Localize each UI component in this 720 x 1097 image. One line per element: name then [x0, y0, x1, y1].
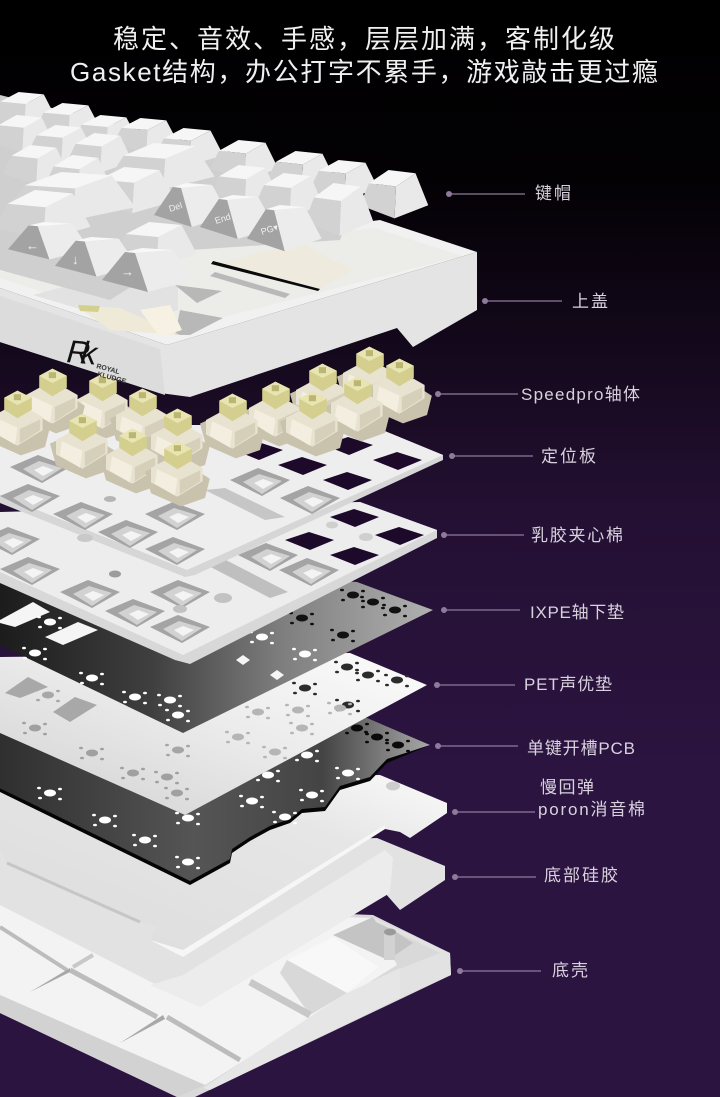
- logo: RK Royal Kluge: ROYAL: [95, 363, 121, 376]
- label: IXPE轴下垫: IXPE轴下垫: [530, 603, 624, 622]
- layer: plate: [0, 425, 443, 577]
- layer: IXPE pad: [0, 560, 433, 733]
- layer: Speedpro switches: [0, 347, 432, 506]
- label: 慢回弹poron消音棉: 慢回弹: [540, 777, 594, 797]
- label: 定位板: 定位板: [541, 447, 596, 466]
- label: 上盖: [482, 292, 608, 311]
- label: 键帽: [446, 184, 571, 203]
- label: 底部硅胶: [452, 866, 618, 885]
- exploded keyboard illustration: [0, 92, 477, 1097]
- label: PET声优垫: [434, 675, 612, 694]
- label: 底部硅胶: 底部硅胶: [544, 866, 618, 885]
- keycap: Del: Del: [168, 200, 183, 214]
- layer: bottom silicone: [0, 838, 445, 1007]
- label: 定位板: [449, 447, 596, 466]
- label: 慢回弹poron消音棉: poron消音棉: [538, 800, 645, 819]
- keycap: left arrow: [8, 222, 90, 259]
- label: 底壳: 底壳: [552, 961, 588, 980]
- logo: RK Royal Kluge: [65, 333, 127, 386]
- layer: PCB: [0, 700, 430, 885]
- layer: keycaps: [0, 92, 428, 300]
- label: 底壳: [457, 961, 588, 980]
- label: PET声优垫: PET声优垫: [524, 675, 612, 694]
- keycap: down arrow: [55, 237, 137, 277]
- keycap: right arrow: →: [121, 264, 134, 279]
- label: 慢回弹poron消音棉: [452, 777, 645, 819]
- keycap: Del: [154, 183, 229, 227]
- keycap: PG down: PG▾: [260, 222, 280, 237]
- layer: latex foam: [0, 502, 437, 664]
- label: 键帽: 键帽: [535, 184, 571, 203]
- keycap: down arrow: ↓: [72, 252, 78, 267]
- logo: RK Royal Kluge: Rk: [65, 333, 100, 372]
- label: 乳胶夹心棉: 乳胶夹心棉: [531, 526, 623, 545]
- title: [70, 24, 658, 87]
- layer: PET pad: [0, 653, 427, 815]
- keycap: right arrow: [102, 248, 193, 292]
- keycap: End: End: [214, 211, 232, 226]
- label: 单键开槽PCB: [435, 739, 635, 758]
- layer: poron foam: [0, 775, 447, 957]
- label: Speedpro轴体: [435, 385, 640, 404]
- layer: top case: [0, 220, 477, 397]
- label: 上盖: 上盖: [572, 292, 608, 311]
- title: Gasket结构，办公打字不累手，游戏敲击更过瘾: [70, 57, 658, 87]
- keycap: left arrow: ←: [26, 238, 39, 253]
- layer: bottom shell: [0, 900, 451, 1097]
- keycap: PG down: [247, 205, 322, 251]
- label: IXPE轴下垫: [441, 603, 624, 622]
- title: 稳定、音效、手感，层层加满，客制化级: [113, 24, 615, 54]
- keycap: End: [200, 195, 275, 239]
- label: 乳胶夹心棉: [441, 526, 623, 545]
- logo: RK Royal Kluge: KLUDGE: [96, 371, 127, 386]
- label: 单键开槽PCB: 单键开槽PCB: [527, 739, 635, 758]
- label: Speedpro轴体: Speedpro轴体: [521, 385, 640, 404]
